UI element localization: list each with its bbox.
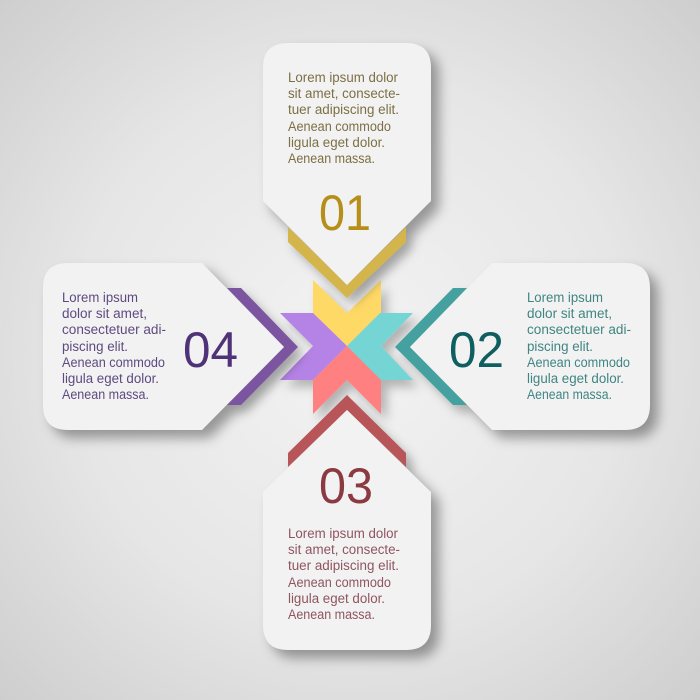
body text 02 <box>527 290 631 402</box>
body text 02: consectetuer adi- <box>527 322 631 337</box>
body text 04: Aenean massa. <box>62 387 149 402</box>
central star <box>280 280 413 414</box>
body text 02: Aenean commodo <box>527 355 630 370</box>
panel 04 <box>43 263 298 438</box>
number 03: 03 <box>319 458 373 514</box>
chevron 02 <box>395 288 467 405</box>
body text 03: Aenean massa. <box>288 607 375 622</box>
card 02 <box>410 263 650 430</box>
star arm: teal <box>347 313 413 380</box>
star arm: pink <box>313 346 381 414</box>
body text 04: Lorem ipsum <box>62 290 138 305</box>
body text 01: Lorem ipsum dolor <box>288 70 399 85</box>
star arm: purple <box>280 313 347 380</box>
card 03 <box>263 410 431 650</box>
card shadow 01 <box>271 51 439 293</box>
body text 01: sit amet, consecte- <box>288 86 400 101</box>
body text 04: ligula eget dolor. <box>62 371 159 386</box>
body text 03: Aenean commodo <box>288 575 391 590</box>
card shadow 03 <box>271 418 439 658</box>
panel 02 <box>395 263 658 438</box>
panel 03 <box>263 395 439 658</box>
star arm: yellow <box>313 280 381 346</box>
body text 02: ligula eget dolor. <box>527 371 624 386</box>
number 01: 01 <box>319 185 371 241</box>
chevron 01 <box>288 227 406 298</box>
body text 01 <box>288 70 400 166</box>
card shadow 04 <box>51 271 292 438</box>
body text 02: Lorem ipsum <box>527 290 603 305</box>
body text 01: Aenean massa. <box>288 151 375 166</box>
body text 03: ligula eget dolor. <box>288 591 385 606</box>
body text 03: tuer adipiscing elit. <box>288 558 399 573</box>
body text 01: Aenean commodo <box>288 119 391 134</box>
body text 04: consectetuer adi- <box>62 322 166 337</box>
body text 03: Lorem ipsum dolor <box>288 526 399 541</box>
body text 02: piscing elit. <box>527 339 593 354</box>
number 04: 04 <box>183 322 238 378</box>
body text 04 <box>62 290 166 402</box>
body text 01: ligula eget dolor. <box>288 135 385 150</box>
card shadow 02 <box>418 271 658 438</box>
number 02: 02 <box>449 322 504 378</box>
body text 03: sit amet, consecte- <box>288 542 400 557</box>
chevron 03 <box>288 395 406 467</box>
card 04 <box>43 263 284 430</box>
body text 04: Aenean commodo <box>62 355 165 370</box>
panel 01 <box>263 43 439 298</box>
body text 01: tuer adipiscing elit. <box>288 102 399 117</box>
chevron 04 <box>227 288 298 405</box>
body text 02: Aenean massa. <box>527 387 612 402</box>
body text 03 <box>288 526 400 622</box>
body text 02: dolor sit amet, <box>527 306 612 321</box>
card 01 <box>263 43 431 285</box>
body text 04: dolor sit amet, <box>62 306 147 321</box>
body text 04: piscing elit. <box>62 339 128 354</box>
